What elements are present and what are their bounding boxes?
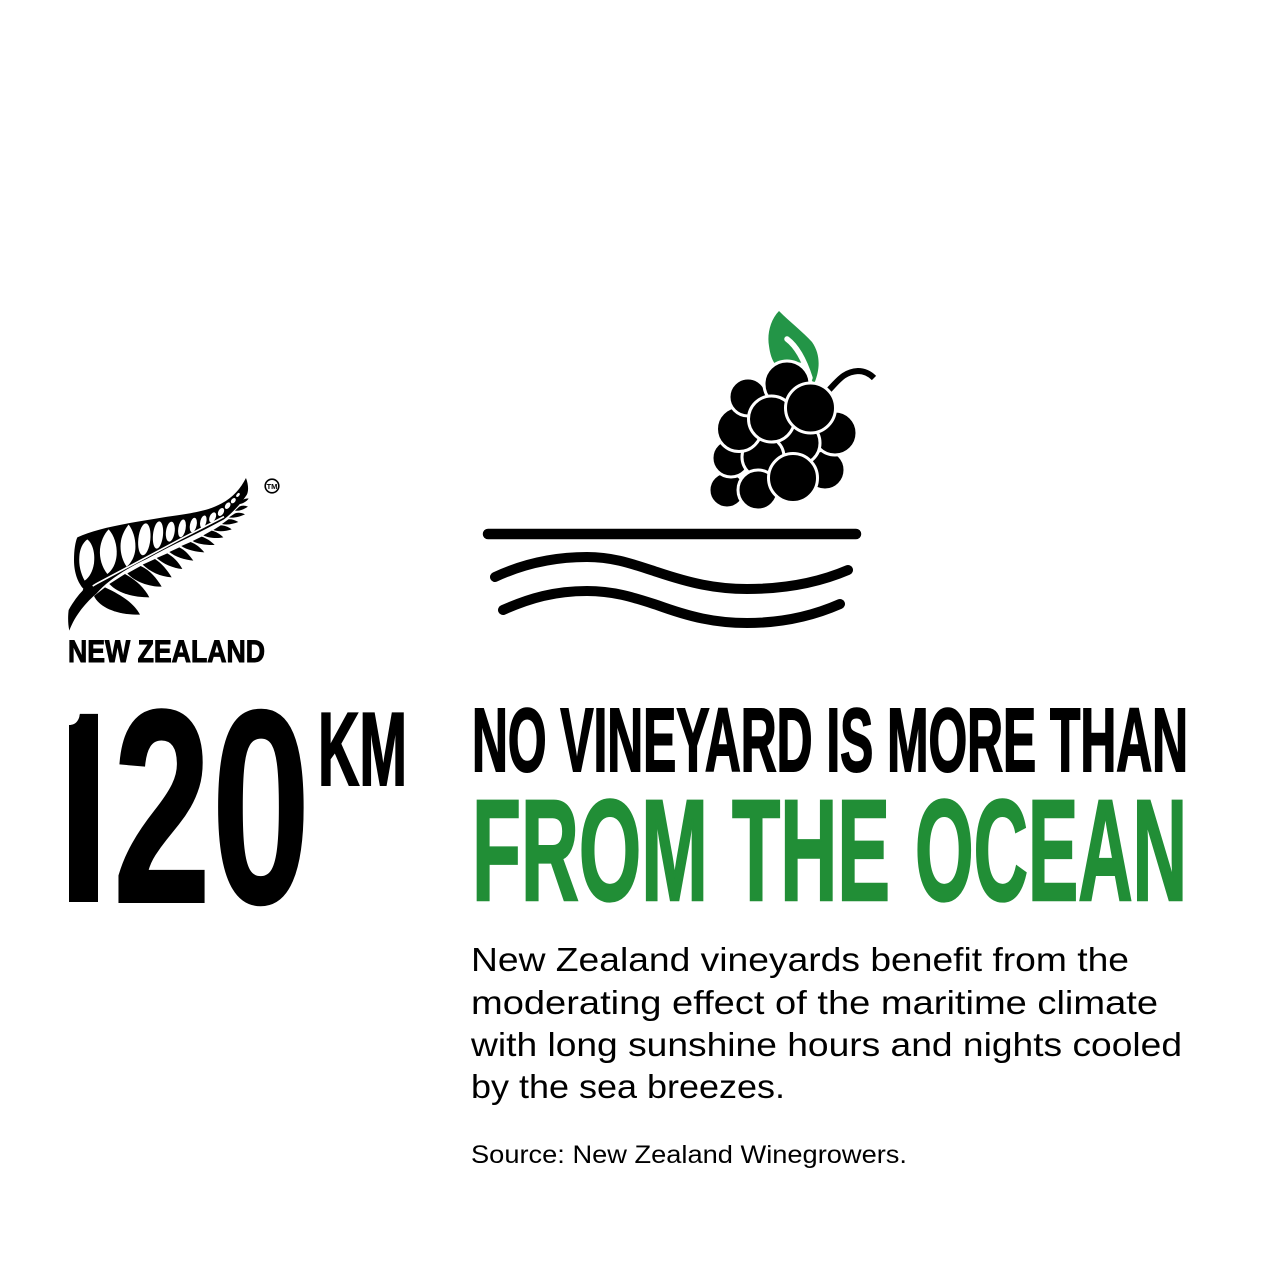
heading line 2: FROM (472, 770, 708, 931)
body text: with long sunshine hours and nights cooled (470, 1026, 1182, 1063)
infographic canvas (68, 311, 1186, 1168)
body text: New Zealand vineyards benefit from the (471, 941, 1129, 978)
logo wordmark: NEW ZEALAND (68, 633, 265, 669)
number 120: 2 (113, 653, 211, 961)
trademark symbol (265, 479, 279, 493)
body text: by the sea breezes. (471, 1068, 785, 1105)
horizon line (488, 529, 856, 539)
source note: Source: New Zealand Winegrowers. (471, 1141, 907, 1169)
heading (472, 691, 1188, 931)
trademark symbol: TM (267, 482, 277, 491)
icon: ocean waves (488, 534, 856, 623)
icon: grapes (709, 311, 874, 510)
number 120: 0 (211, 652, 311, 964)
body text: moderating effect of the maritime climate (471, 984, 1158, 1021)
body text (470, 941, 1182, 1105)
upper wave (495, 557, 848, 589)
icon: green leaf (768, 311, 819, 384)
number 120 (69, 708, 304, 906)
unit KM: KM (318, 692, 407, 808)
heading line 2 (472, 770, 1187, 931)
number 120: 1 (12, 656, 144, 960)
icon: grape stem (828, 371, 874, 391)
grape cluster (709, 361, 857, 510)
lower wave (503, 591, 840, 623)
icon: silver fern (68, 478, 249, 631)
logo: New Zealand fern mark (68, 478, 279, 669)
heading line 2: THE (732, 770, 890, 931)
big number: 120 km (69, 708, 404, 906)
